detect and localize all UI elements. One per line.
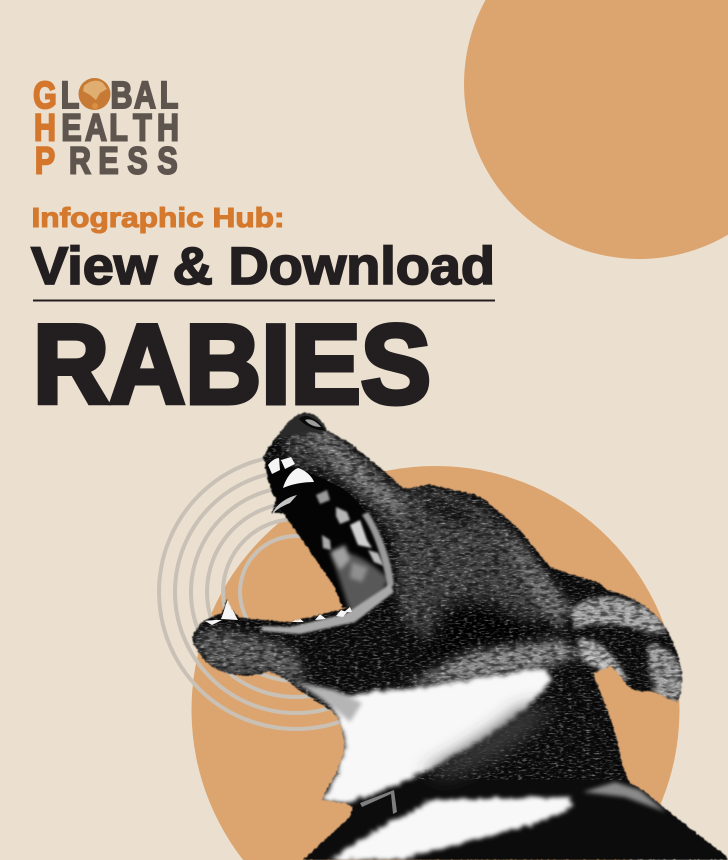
sound wave rings	[159, 455, 433, 729]
head fur shading	[283, 420, 570, 660]
main title: RABIES	[33, 302, 431, 427]
upper lip	[362, 512, 394, 590]
heading: View & Download	[31, 237, 495, 296]
logo initials: G	[33, 75, 57, 117]
teeth	[205, 457, 352, 625]
dog illustration	[180, 400, 728, 860]
light fur texture	[192, 416, 683, 780]
chin and jaw fur	[193, 631, 303, 688]
decorative circle: top right	[464, 0, 728, 259]
open mouth interior	[262, 462, 392, 616]
logo wordmark: LBAL	[61, 75, 178, 117]
dog ear	[570, 597, 684, 705]
white chest bib	[322, 668, 552, 803]
dog nose	[278, 413, 328, 437]
logo wordmark: RESS	[69, 140, 178, 182]
logo wordmark	[61, 75, 179, 182]
collar buckle	[360, 790, 397, 814]
subtitle: Infographic Hub:	[32, 202, 284, 233]
dark fur texture	[192, 427, 683, 780]
lower white chest band	[328, 797, 575, 860]
logo initials: H	[34, 107, 56, 149]
logo initials	[33, 75, 57, 182]
heading rule	[33, 300, 495, 302]
grey upper bib	[296, 682, 362, 722]
shoulder highlight	[583, 782, 666, 812]
logo initials: P	[35, 140, 55, 182]
shaded bib edge	[425, 705, 555, 778]
decorative circle: behind dog	[191, 466, 679, 860]
grey fur above bib	[405, 640, 582, 685]
lower lip	[262, 584, 394, 634]
dog body base	[180, 400, 728, 860]
logo: Global Health Press	[33, 75, 179, 182]
logo globe	[78, 78, 110, 110]
logo wordmark: EALTH	[61, 107, 179, 149]
